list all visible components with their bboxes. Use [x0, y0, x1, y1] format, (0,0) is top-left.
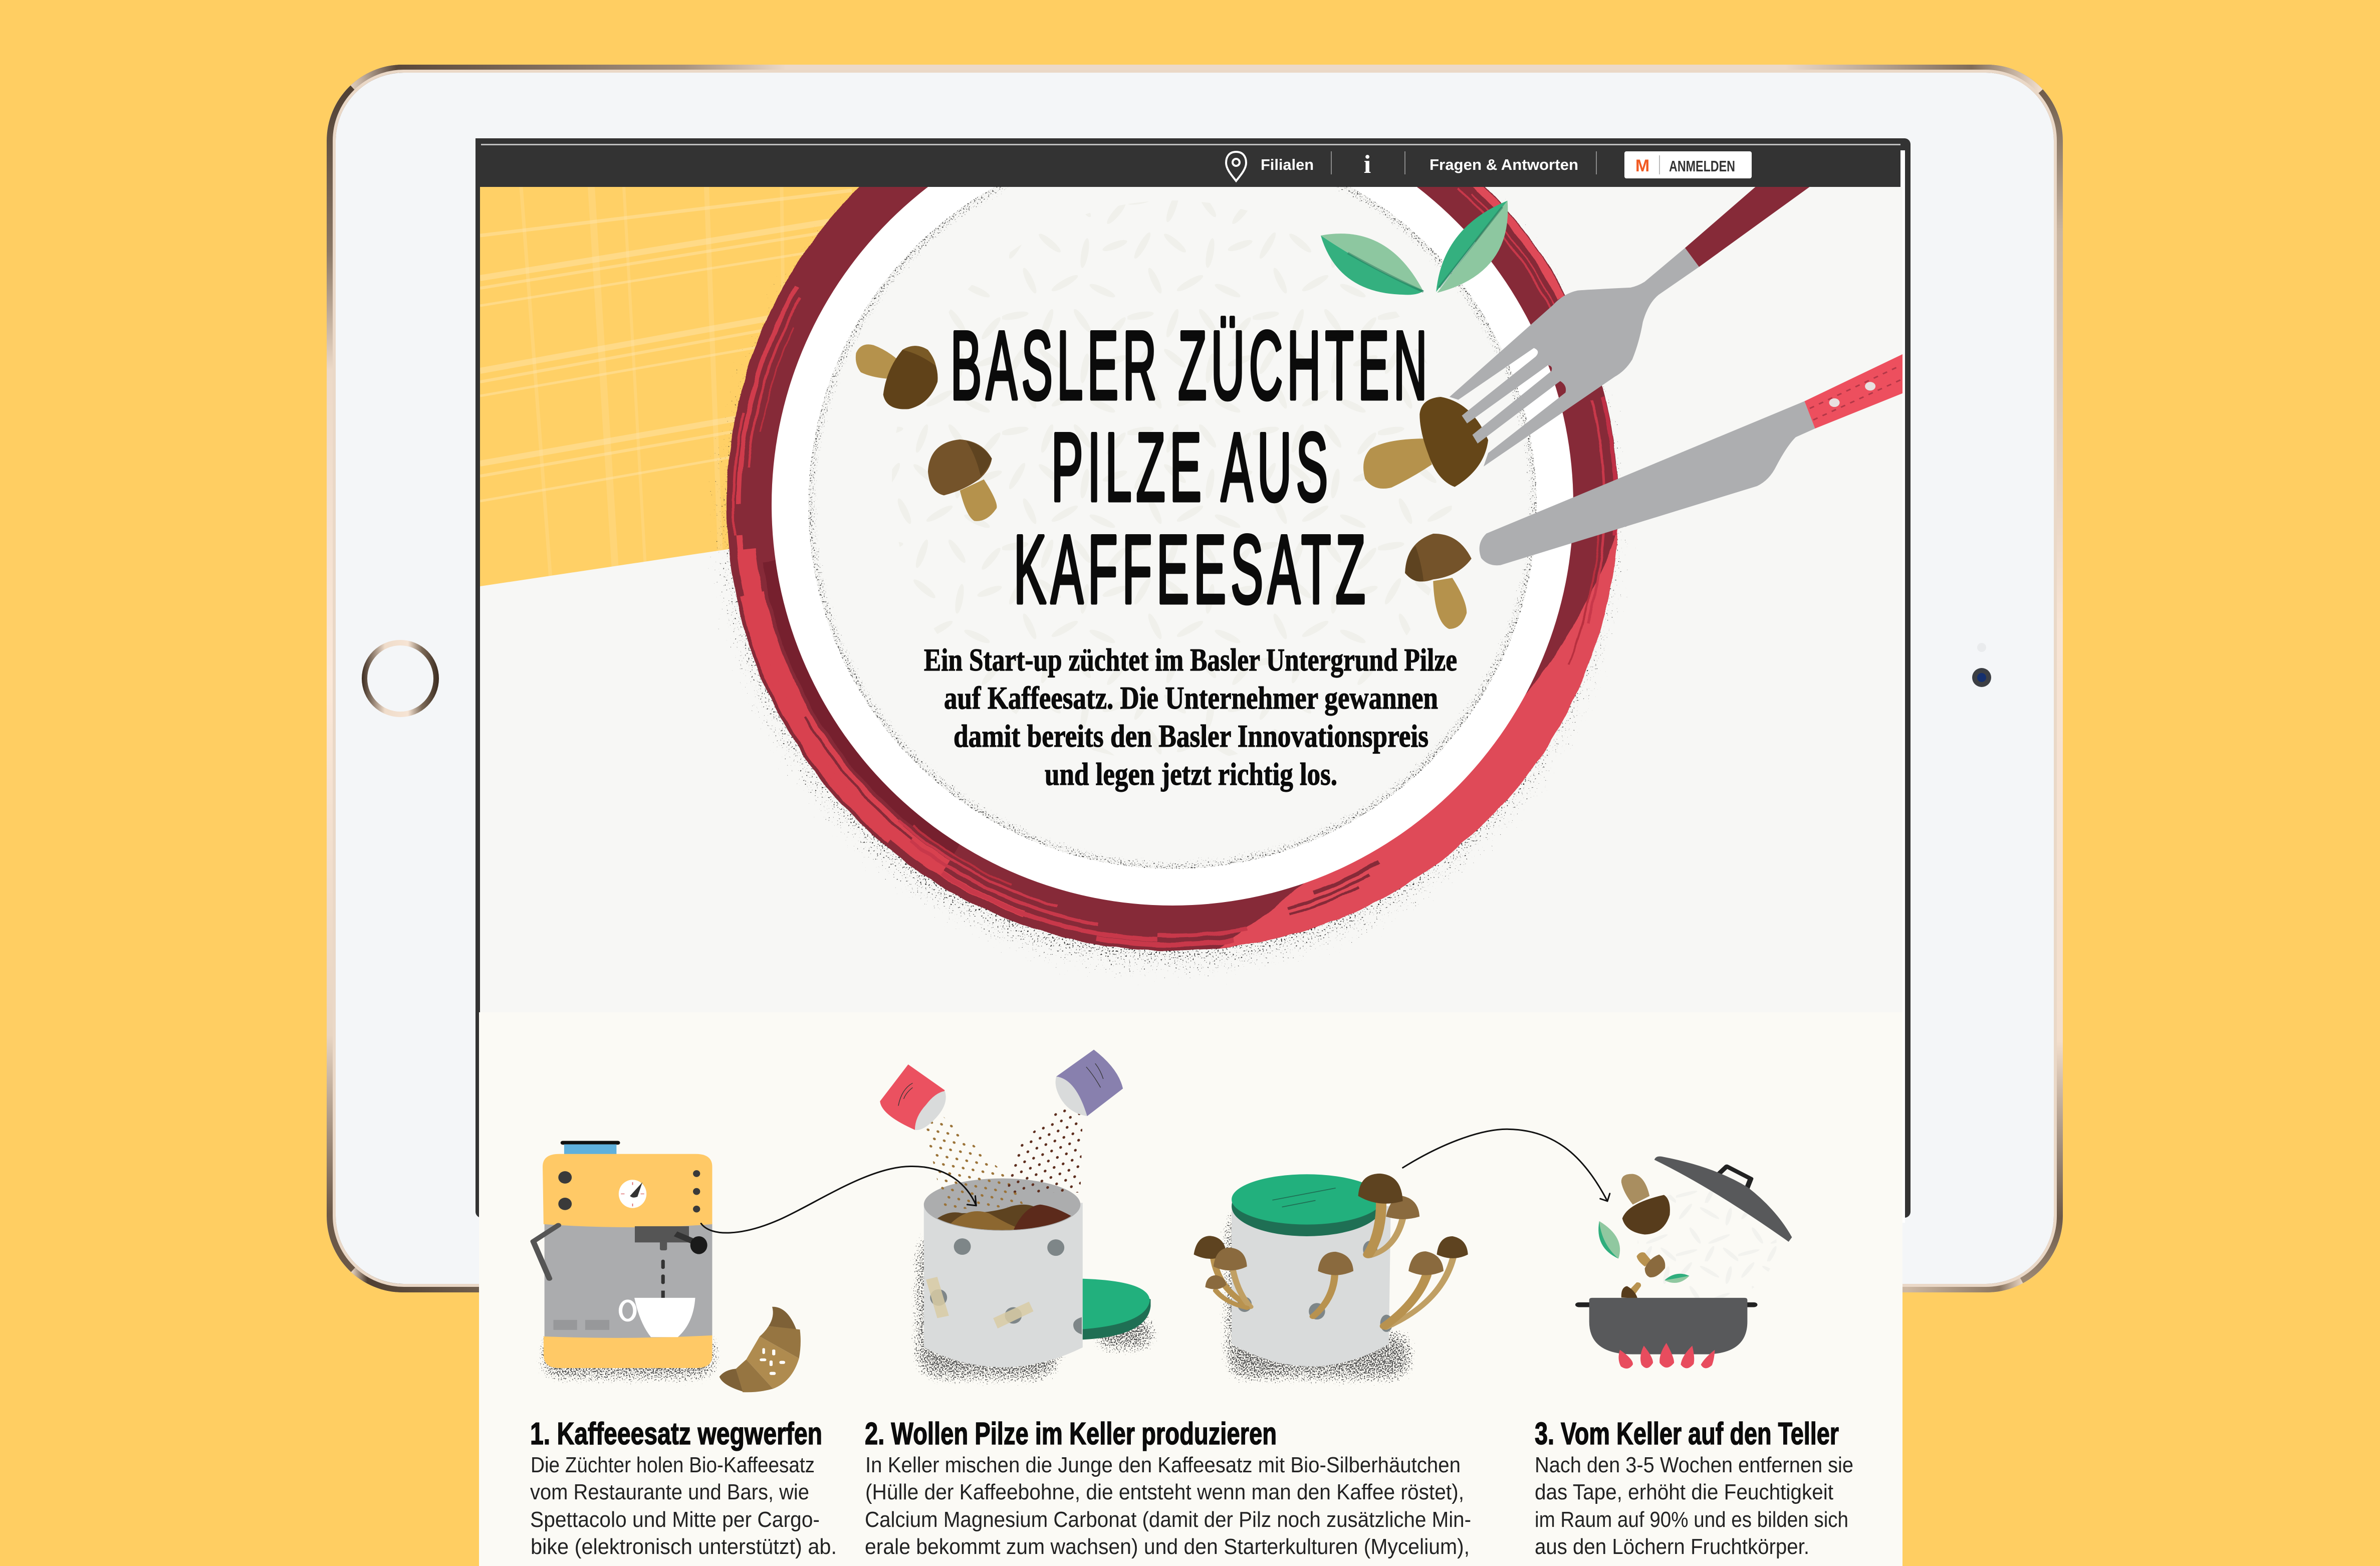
plate centre: [808, 140, 1537, 869]
lower section background: [479, 1012, 1902, 1566]
coffee drip: [661, 1260, 665, 1298]
step 2b: bucket with mushrooms: [1194, 1174, 1468, 1367]
bucket lid: [1232, 1174, 1382, 1236]
plate shadow stipple: [708, 187, 1636, 985]
step 2: bucket illustration: [880, 1050, 1123, 1367]
intro text: [924, 642, 1457, 792]
screen frame: [475, 138, 1911, 1218]
leaf left: [1321, 234, 1423, 295]
login button: ANMELDEN: [1669, 157, 1735, 175]
login button: [1624, 151, 1752, 178]
knife: [1480, 352, 1907, 565]
bucket opening: [924, 1179, 1080, 1231]
step 3 body: im Raum auf 90% und es bilden sich: [1535, 1507, 1848, 1532]
navigation bar: [475, 138, 1900, 187]
tape patches: [926, 1277, 1034, 1328]
coffee grounds: [935, 1205, 1078, 1234]
step 2 body: erale bekommt zum wachsen) und den Starterkulturen (Mycelium),: [865, 1534, 1470, 1559]
mushroom in pot: [1621, 1282, 1641, 1298]
step 3 heading: 3. Vom Keller auf den Teller: [1535, 1417, 1839, 1451]
step 3 body: [1535, 1453, 1853, 1559]
plate rim: [550, 0, 1795, 1128]
holes: [1238, 1241, 1393, 1332]
stipple: step illustrations: [534, 1200, 1420, 1388]
step 1 body: [530, 1453, 837, 1559]
step 2 body: (Hülle der Kaffeebohne, die entsteht wenn man den Kaffee röstet),: [865, 1480, 1464, 1504]
camera: [1972, 668, 1991, 687]
tablet metal edge: [321, 50, 2069, 1313]
plate white well: [772, 104, 1573, 906]
step 2 body: [865, 1453, 1471, 1559]
hero background: [480, 187, 1902, 1019]
fork handle: [1685, 185, 1811, 267]
falling mushroom large: [1621, 1174, 1670, 1235]
mushrooms: [856, 344, 1488, 629]
small leaf: [1664, 1274, 1690, 1283]
mushroom 3: [1363, 397, 1488, 489]
intro text: damit bereits den Basler Innovationspreis: [954, 718, 1429, 754]
pot handles: [1575, 1302, 1757, 1307]
step 3: cooking pot illustration: [1575, 1157, 1792, 1369]
hero illustration: [480, 187, 1902, 985]
coffee cup: [620, 1298, 695, 1337]
steam handle: [533, 1225, 558, 1278]
knife blade: [1480, 401, 1815, 565]
machine knobs: [558, 1170, 700, 1213]
intro text: auf Kaffeesatz. Die Unternehmer gewannen: [944, 680, 1438, 716]
nav: info: i: [1364, 150, 1371, 179]
plate inner stipple: [808, 140, 1537, 869]
title: PILZE AUS: [1051, 413, 1332, 522]
arrow: bucket to pot: [1403, 1129, 1610, 1201]
step 1 text: [530, 1417, 837, 1559]
bucket holes: [930, 1238, 1082, 1334]
arrow: machine to bucket: [701, 1166, 976, 1233]
leaf right: [1436, 201, 1508, 293]
rice steam: [1637, 1186, 1777, 1303]
step 3 text: [1535, 1417, 1853, 1559]
leaves: [1321, 201, 1508, 295]
step 1 body: Spettacolo und Mitte per Cargo-: [530, 1507, 820, 1532]
icon: location pin: [1226, 152, 1246, 181]
sensor dot: [1977, 643, 1986, 652]
knife handle: [1804, 352, 1907, 428]
intro text: Ein Start-up züchtet im Basler Untergrund Pilze: [924, 642, 1457, 678]
home button: [362, 640, 439, 717]
title: [950, 311, 1432, 624]
tablet inner light rim: [334, 71, 2055, 1285]
nav: Fragen und Antworten: Fragen & Antworten: [1430, 156, 1578, 173]
fork head and tines: [1450, 248, 1699, 467]
machine buttons: [553, 1320, 609, 1330]
rim brush strokes: [550, 0, 1795, 1128]
mushroom 1: [856, 344, 938, 409]
text: BASLER ZÜCHTEN: [950, 311, 1432, 420]
falling leaf: [1598, 1221, 1620, 1259]
step 3 body: das Tape, erhöht die Feuchtigkeit: [1535, 1480, 1833, 1504]
group head: [635, 1226, 707, 1254]
purple can: [1056, 1050, 1123, 1116]
falling grains right: [1007, 1096, 1083, 1193]
mushroom 4: [1405, 534, 1472, 629]
step 1 body: bike (elektronisch unterstützt) ab.: [531, 1534, 837, 1559]
machine base: [544, 1335, 712, 1368]
mushroom caps: [1194, 1174, 1468, 1289]
step 3 body: Nach den 3-5 Wochen entfernen sie: [1535, 1453, 1853, 1477]
step 1: coffee machine illustration: [533, 1141, 801, 1392]
machine body: [545, 1222, 712, 1339]
bucket body: [924, 1203, 1083, 1367]
step 1 body: vom Restaurante und Bars, wie: [530, 1480, 809, 1504]
mushroom stems: [1214, 1203, 1453, 1327]
title: KAFFEESATZ: [1014, 515, 1370, 624]
red can: [880, 1064, 946, 1130]
plate: [550, 0, 1795, 1128]
article page: [479, 187, 1902, 1566]
step 2 body: In Keller mischen die Junge den Kaffeesatz mit Bio-Silberhäutchen: [865, 1453, 1461, 1477]
rim bright crescent lower right: [1219, 528, 1618, 948]
step 2 text: [865, 1417, 1471, 1559]
step 2 heading: 2. Wollen Pilze im Keller produzieren: [865, 1417, 1277, 1451]
login button: M: [1635, 156, 1649, 175]
bucket body: [1232, 1199, 1391, 1367]
falling mushroom small: [1636, 1252, 1665, 1277]
falling grains left: [924, 1115, 1025, 1210]
nav: Filialen: Filialen: [1261, 156, 1314, 173]
pot body: [1589, 1298, 1747, 1355]
step 3 body: aus den Löchern Fruchtkörper.: [1535, 1534, 1809, 1559]
tablet device: [321, 50, 2069, 1313]
step 2: lid behind bucket: [1078, 1278, 1150, 1340]
rice pattern: [892, 200, 1453, 762]
burner flames: [1618, 1343, 1715, 1369]
mushroom 2: [928, 439, 997, 521]
fork: [1450, 185, 1811, 467]
intro text: und legen jetzt richtig los.: [1045, 756, 1337, 792]
croissant: [720, 1307, 801, 1392]
tablet body: [327, 65, 2063, 1292]
pot lid: [1654, 1157, 1792, 1242]
pressure gauge: [619, 1180, 646, 1208]
step 1 heading: 1. Kaffeeesatz wegwerfen: [530, 1417, 822, 1451]
machine top: [561, 1141, 620, 1155]
machine head: [543, 1154, 712, 1227]
step 2 body: Calcium Magnesium Carbonat (damit der Pilz noch zusätzliche Min-: [865, 1507, 1471, 1532]
step 1 body: Die Züchter holen Bio-Kaffeesatz: [531, 1453, 815, 1477]
tablecloth: [480, 187, 859, 586]
